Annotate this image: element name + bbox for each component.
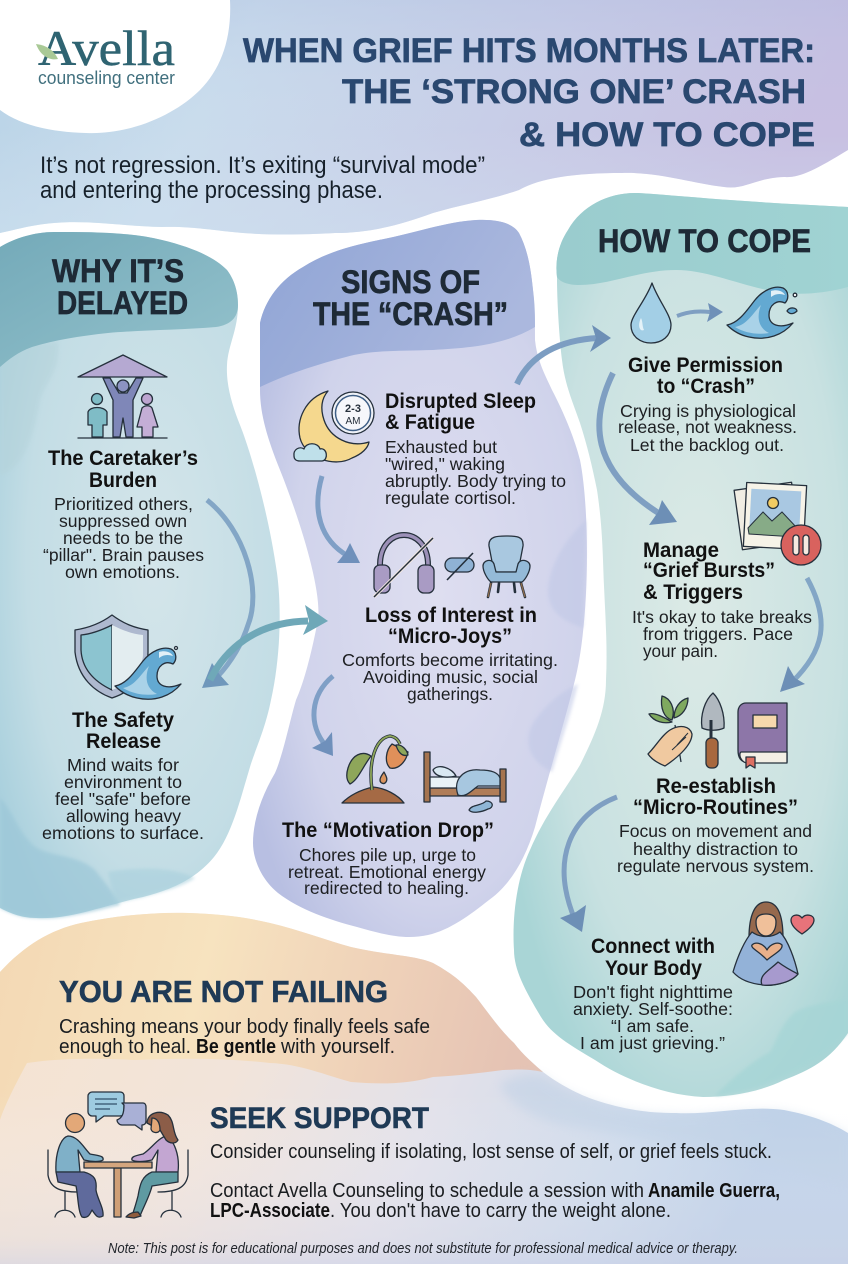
text: loss of interest in micro-joys: “Micro-Joys” bbox=[388, 625, 512, 648]
callout: seek support: . You don't have to carry the weight alone. bbox=[330, 1200, 671, 1222]
text: the motivation drop: redirected to healing. bbox=[304, 878, 469, 898]
text: connect with your body: Connect with bbox=[591, 935, 715, 958]
text: give permission to crash: Let the backlog out. bbox=[630, 435, 784, 455]
arrow: why delayed to signs of crash bbox=[210, 605, 328, 680]
text: the safety release: feel "safe" before bbox=[55, 789, 191, 809]
icon: crossed headphones and armchair bbox=[374, 535, 530, 597]
callout: you are not failing: Be gentle bbox=[196, 1036, 276, 1058]
text: the caretaker's burden: Burden bbox=[89, 469, 157, 492]
logo bbox=[0, 0, 230, 133]
text: disrupted sleep and fatigue: & Fatigue bbox=[385, 411, 475, 434]
text: the motivation drop: retreat. Emotional energy bbox=[288, 862, 486, 882]
text: manage grief bursts and triggers bbox=[632, 539, 812, 661]
heading: signs of the crash: THE “CRASH” bbox=[313, 296, 508, 332]
text: the safety release: emotions to surface. bbox=[42, 823, 204, 843]
callout: seek support: SEEK SUPPORT bbox=[210, 1102, 429, 1135]
text: disrupted sleep and fatigue: "wired," waking bbox=[385, 454, 505, 474]
text: connect with your body: Your Body bbox=[605, 957, 702, 980]
text: loss of interest in micro-joys: Loss of Interest in bbox=[365, 604, 537, 627]
text: manage grief bursts and triggers: your pain. bbox=[643, 641, 718, 661]
text: the caretaker's burden: needs to be the bbox=[63, 528, 183, 548]
text: give permission to crash: to “Crash” bbox=[657, 375, 755, 398]
title: WHEN GRIEF HITS MONTHS LATER: bbox=[243, 32, 815, 70]
text: the safety release: Release bbox=[86, 730, 161, 753]
subtitle bbox=[40, 152, 485, 204]
panel: how to cope bbox=[514, 193, 848, 1097]
icon: photos with pause button bbox=[734, 482, 821, 565]
icon: hand with plant, trowel and book bbox=[648, 693, 787, 768]
icon: caretaker holding up roof bbox=[78, 355, 167, 438]
text: the motivation drop: Chores pile up, urge to bbox=[299, 845, 476, 865]
callout: you are not failing: Crashing means your body finally feels safe bbox=[59, 1016, 430, 1038]
text: the caretaker's burden: Prioritized others, bbox=[54, 494, 193, 514]
arrow: signs of crash to how to cope bbox=[517, 325, 611, 384]
text: give permission to crash: Give Permission bbox=[628, 354, 783, 377]
text: manage grief bursts and triggers: & Triggers bbox=[643, 581, 743, 604]
text: the motivation drop: The “Motivation Drop” bbox=[282, 819, 494, 842]
callout: you are not failing: enough to heal. bbox=[59, 1036, 191, 1058]
text: re-establish micro-routines: healthy distraction to bbox=[633, 839, 798, 859]
callout: seek support bbox=[210, 1102, 780, 1222]
text: disrupted sleep and fatigue: abruptly. Body trying to bbox=[385, 471, 566, 491]
text: loss of interest in micro-joys: Comforts become irritating. bbox=[342, 650, 558, 670]
text: loss of interest in micro-joys bbox=[342, 604, 558, 704]
title: & HOW TO COPE bbox=[519, 116, 815, 154]
arrow: manage bursts to micro-routines bbox=[780, 578, 821, 692]
arrow: sleep to loss of interest bbox=[318, 476, 360, 563]
text: loss of interest in micro-joys: gatherings. bbox=[407, 684, 493, 704]
text: the caretaker's burden bbox=[43, 447, 204, 582]
callout: you are not failing: YOU ARE NOT FAILING bbox=[59, 974, 388, 1009]
title bbox=[243, 32, 815, 154]
text: the caretaker's burden: “pillar". Brain pauses bbox=[43, 545, 204, 565]
heading: signs of the crash: SIGNS OF bbox=[341, 264, 480, 300]
icon: shield and wave bbox=[75, 615, 181, 699]
icon: moon, clock and cloud: 2-3 bbox=[345, 403, 361, 415]
text: loss of interest in micro-joys: Avoiding music, social bbox=[363, 667, 538, 687]
text: disrupted sleep and fatigue: regulate cortisol. bbox=[385, 488, 516, 508]
text: disrupted sleep and fatigue: Disrupted Sleep bbox=[385, 390, 536, 413]
callout: seek support: LPC-Associate bbox=[210, 1200, 330, 1222]
text: the motivation drop bbox=[282, 819, 494, 898]
text: manage grief bursts and triggers: “Grief Bursts” bbox=[643, 559, 775, 582]
text: re-establish micro-routines bbox=[617, 775, 814, 876]
arrow: caretaker to safety release bbox=[202, 500, 253, 688]
logo: Avella bbox=[38, 20, 175, 76]
panel: signs of the crash bbox=[253, 220, 587, 937]
text: the caretaker's burden: The Caretaker’s bbox=[48, 447, 198, 470]
icon: two people talking at a table bbox=[48, 1092, 188, 1218]
icon: wilted plant and unmade bed bbox=[342, 736, 506, 812]
heading: how to cope: HOW TO COPE bbox=[598, 223, 811, 259]
text: give permission to crash: Crying is physiological bbox=[620, 401, 796, 421]
subtitle: It’s not regression. It’s exiting “survival mode” bbox=[40, 152, 485, 179]
title: THE ‘STRONG ONE’ CRASH bbox=[342, 73, 806, 111]
text: the safety release: allowing heavy bbox=[66, 806, 181, 826]
text: connect with your body: “I am safe. bbox=[611, 1016, 694, 1036]
text: the safety release: Mind waits for bbox=[67, 755, 179, 775]
footer note: Note: This post is for educational purposes and does not substitute for professional medical advice or therapy. bbox=[108, 1240, 738, 1257]
arrow: micro-routines to connect with body bbox=[560, 797, 617, 932]
text: the safety release bbox=[42, 709, 204, 843]
text: the safety release: environment to bbox=[64, 772, 182, 792]
text: re-establish micro-routines: Focus on movement and bbox=[619, 821, 812, 841]
icon: moon, clock and cloud: AM bbox=[346, 416, 360, 427]
text: manage grief bursts and triggers: It's okay to take breaks bbox=[632, 607, 812, 627]
heading: why it's delayed bbox=[52, 253, 188, 321]
text: connect with your body: anxiety. Self-soothe: bbox=[573, 999, 733, 1019]
logo: counseling center bbox=[38, 67, 175, 88]
text: the caretaker's burden: suppressed own bbox=[59, 511, 187, 531]
heading: signs of the crash bbox=[313, 264, 508, 332]
panel: why it's delayed bbox=[0, 232, 280, 918]
callout: you are not failing bbox=[59, 974, 430, 1058]
text: the safety release: The Safety bbox=[72, 709, 174, 732]
callout: seek support: Contact Avella Counseling to schedule a session with bbox=[210, 1180, 644, 1202]
text: give permission to crash bbox=[618, 354, 797, 455]
icon: moon, clock and cloud bbox=[294, 391, 374, 462]
text: re-establish micro-routines: regulate nervous system. bbox=[617, 856, 814, 876]
icon: person wrapped in blanket with heart bbox=[733, 902, 814, 985]
heading: why it's delayed: WHY IT’S bbox=[52, 253, 184, 289]
arrow: loss of interest to motivation drop bbox=[312, 676, 333, 756]
text: disrupted sleep and fatigue bbox=[385, 390, 566, 508]
text: re-establish micro-routines: “Micro-Routines” bbox=[633, 796, 798, 819]
callout: seek support: Anamile Guerra, bbox=[648, 1180, 780, 1202]
subtitle: and entering the processing phase. bbox=[40, 177, 383, 204]
text: re-establish micro-routines: Re-establish bbox=[656, 775, 776, 798]
callout: you are not failing: with yourself. bbox=[280, 1036, 395, 1058]
text: give permission to crash: release, not weakness. bbox=[618, 417, 797, 437]
text: manage grief bursts and triggers: Manage bbox=[643, 539, 719, 562]
text: connect with your body: I am just grieving.” bbox=[580, 1033, 725, 1053]
text: manage grief bursts and triggers: from triggers. Pace bbox=[643, 624, 793, 644]
text: connect with your body bbox=[573, 935, 733, 1053]
text: connect with your body: Don't fight nighttime bbox=[573, 982, 733, 1002]
text: disrupted sleep and fatigue: Exhausted but bbox=[385, 437, 497, 457]
icon: water drop turning into wave bbox=[631, 283, 797, 343]
text: the caretaker's burden: own emotions. bbox=[65, 562, 180, 582]
panel: you are not failing and seek support bbox=[0, 913, 848, 1264]
panel: header bbox=[0, 0, 848, 234]
arrow: give permission to manage bursts bbox=[599, 373, 677, 525]
callout: seek support: Consider counseling if isolating, lost sense of self, or grief feels stuck. bbox=[210, 1141, 772, 1163]
heading: why it's delayed: DELAYED bbox=[57, 285, 188, 321]
